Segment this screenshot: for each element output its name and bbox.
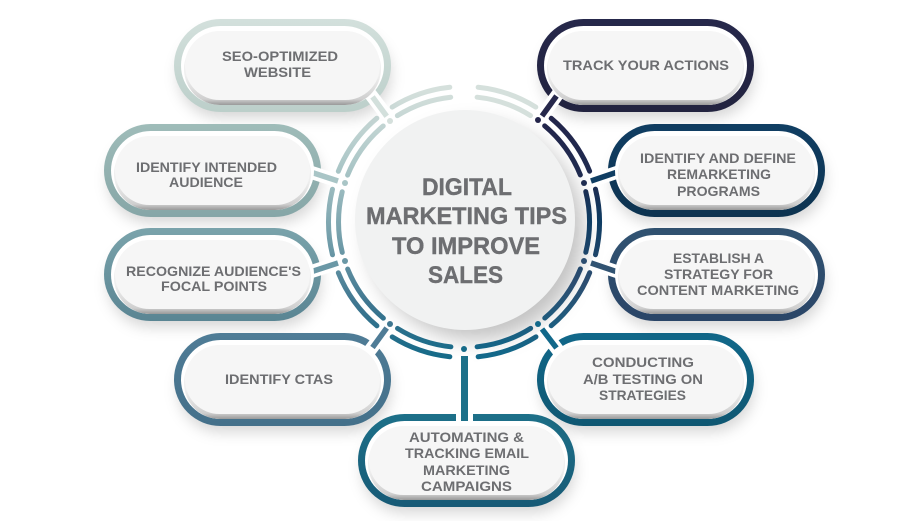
pill: recognize audience's focal points: FOCAL POINTS (161, 278, 267, 294)
pill: identify and define remarketing programs: PROGRAMS (677, 183, 760, 199)
pill: SEO-optimized website: SEO-OPTIMIZED (222, 48, 338, 64)
title: MARKETING TIPS (366, 203, 567, 230)
pill: automating and tracking email marketing campaigns: TRACKING EMAIL (405, 445, 529, 461)
pill: conducting A/B testing on strategies: CONDUCTING (592, 354, 694, 370)
pill: identify intended audience: AUDIENCE (169, 174, 243, 190)
pill: track your actions (537, 19, 754, 118)
title: TO IMPROVE (392, 233, 540, 260)
connector dots (342, 117, 587, 352)
title: DIGITAL (422, 174, 512, 201)
central circle shadow (368, 124, 584, 340)
pill: SEO-optimized website: WEBSITE (244, 64, 311, 80)
pill: conducting A/B testing on strategies (537, 329, 754, 432)
ring: double segmented ring (328, 87, 600, 357)
pill: establish a strategy for content marketing: STRATEGY FOR (664, 266, 773, 282)
pill: automating and tracking email marketing campaigns: MARKETING (423, 462, 510, 478)
pill: automating and tracking email marketing campaigns: AUTOMATING & (409, 429, 524, 445)
pill: identify CTAs: IDENTIFY CTAS (225, 371, 333, 387)
pill: conducting A/B testing on strategies: A/B TESTING ON (583, 371, 703, 387)
pill: recognize audience's focal points: RECOGNIZE AUDIENCE'S (126, 263, 301, 279)
pill: identify CTAs (174, 328, 391, 432)
pill: SEO-optimized website (174, 19, 391, 118)
pill: automating and tracking email marketing campaigns (358, 356, 575, 513)
pill: establish a strategy for content marketing: CONTENT MARKETING (637, 282, 799, 298)
pill: establish a strategy for content marketing: ESTABLISH A (673, 250, 764, 266)
title: SALES (428, 262, 503, 289)
pill: establish a strategy for content marketing (591, 228, 825, 327)
pill: track your actions: TRACK YOUR ACTIONS (563, 57, 729, 73)
pill: identify and define remarketing programs (591, 124, 825, 223)
pill: identify intended audience: IDENTIFY INTENDED (136, 159, 277, 175)
pill: recognize audience's focal points (104, 228, 338, 327)
pill: conducting A/B testing on strategies: STRATEGIES (599, 387, 686, 403)
pill: identify and define remarketing programs: REMARKETING (667, 166, 771, 182)
central circle (355, 110, 575, 330)
pill: identify and define remarketing programs: IDENTIFY AND DEFINE (640, 150, 796, 166)
pill: identify intended audience (104, 124, 338, 223)
title (366, 174, 567, 289)
pill: automating and tracking email marketing campaigns: CAMPAIGNS (421, 478, 512, 494)
